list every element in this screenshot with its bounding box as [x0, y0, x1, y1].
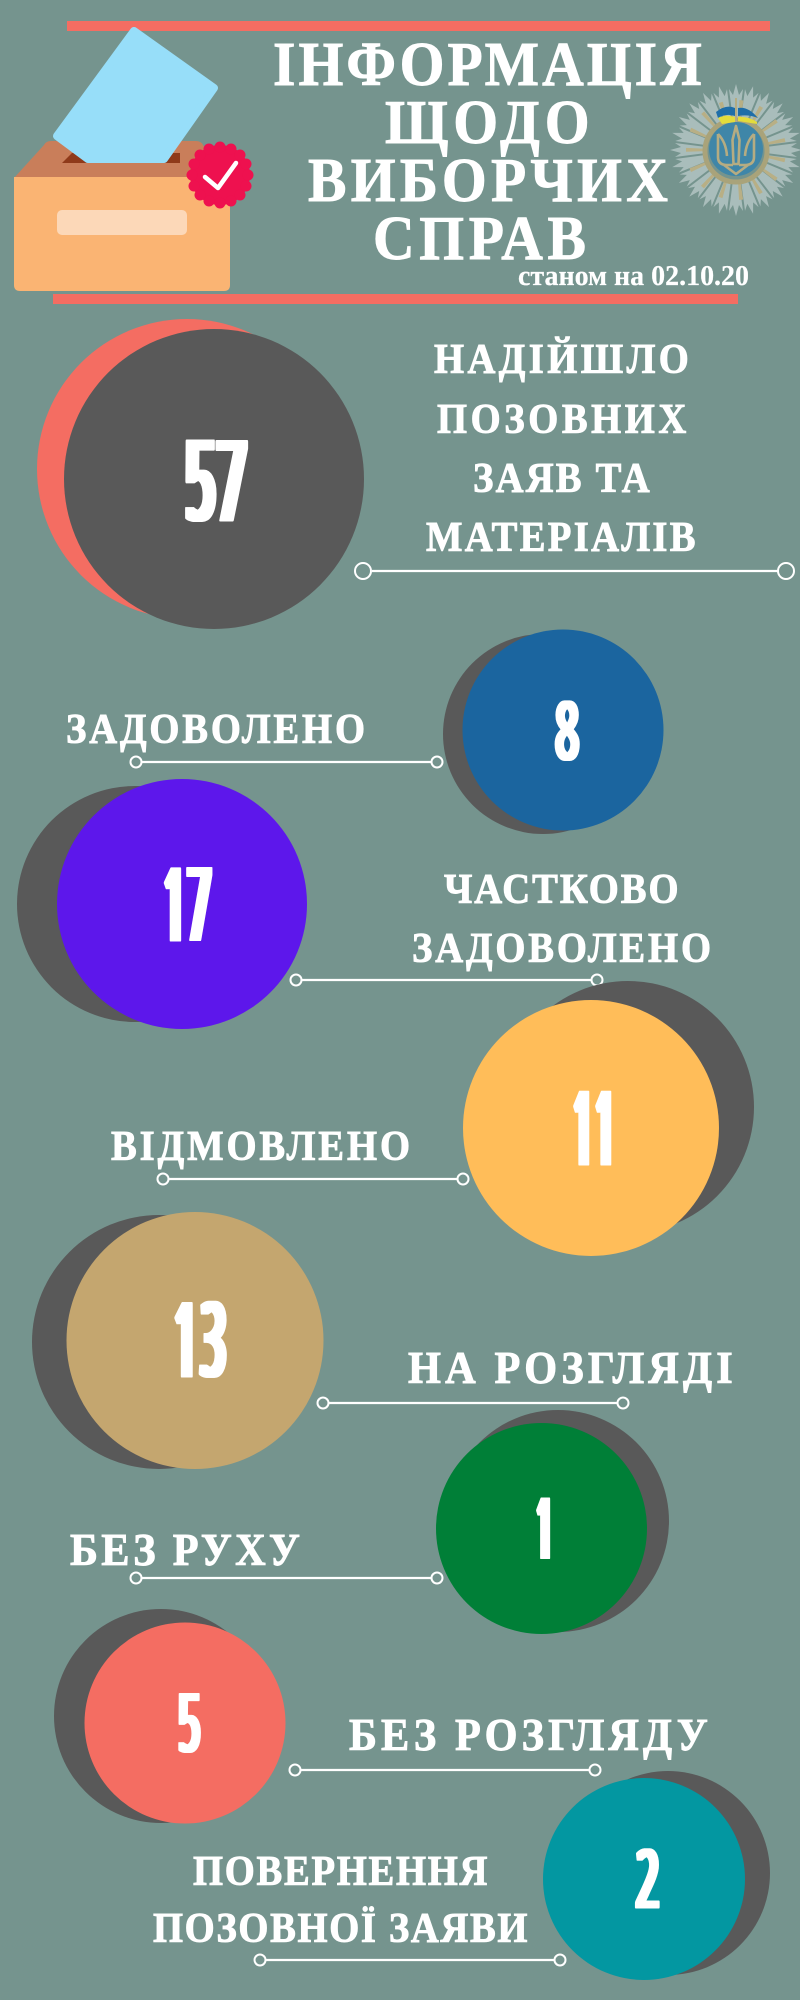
- title: ІНФОРМАЦІЯ: [273, 30, 702, 98]
- stat: 2 returned claim: 2: [635, 1842, 661, 1920]
- connector: [254, 1954, 566, 1966]
- label: ПОЗОВНИХ: [437, 396, 686, 442]
- label: БЕЗ РОЗГЛЯДУ: [349, 1709, 708, 1760]
- stat: 1 no movement: 1: [536, 1492, 553, 1572]
- header panel: [14, 21, 800, 304]
- connector: [318, 1398, 628, 1408]
- label: [426, 336, 696, 560]
- label: ЧАСТКОВО: [444, 866, 679, 912]
- label: ЗАЯВ ТА: [473, 455, 650, 501]
- label: [153, 1848, 527, 1951]
- icon: emblem: [670, 84, 800, 216]
- box front: [14, 177, 230, 291]
- connector: [290, 974, 602, 986]
- label: НА РОЗГЛЯДІ: [408, 1342, 733, 1393]
- label: ЗАДОВОЛЕНО: [412, 925, 711, 971]
- label: НАДІЙШЛО: [434, 336, 689, 382]
- stat: 11 refused: [111, 981, 754, 1256]
- top accent bar: [67, 21, 770, 31]
- stat: 8 granted: 8: [555, 694, 579, 772]
- box lid: [14, 141, 230, 178]
- label: ПОВЕРНЕННЯ: [193, 1848, 487, 1894]
- connector: [130, 1572, 442, 1584]
- stat: 5 without review: 5: [177, 1686, 201, 1764]
- label: ПОЗОВНОЇ ЗАЯВИ: [153, 1905, 527, 1951]
- title: [273, 30, 702, 272]
- connector: [130, 756, 442, 768]
- stat: 17 partially granted: 17: [162, 860, 212, 956]
- connector: [158, 1174, 468, 1184]
- stat: 8 granted: [66, 630, 664, 834]
- stat: 57 received: 57: [184, 431, 248, 537]
- box label: [57, 210, 187, 235]
- ballot paper: [57, 31, 214, 159]
- label: БЕЗ РУХУ: [70, 1524, 300, 1575]
- bottom accent bar: [53, 294, 738, 304]
- label: ВІДМОВЛЕНО: [111, 1123, 410, 1169]
- stat: 1 no movement: [70, 1410, 669, 1634]
- connector: [355, 563, 794, 579]
- title: СПРАВ: [373, 204, 586, 272]
- label: [412, 866, 711, 971]
- stat: 17 partially granted: [17, 779, 711, 1029]
- title: ВИБОРЧИХ: [308, 146, 668, 214]
- stat: 13 under review: 13: [172, 1294, 227, 1392]
- stat: 57 received: [37, 319, 794, 629]
- ballot slot: [62, 153, 180, 163]
- icon: ballot box: [14, 31, 254, 291]
- stat: 5 without review: [54, 1609, 708, 1824]
- stat: 13 under review: [32, 1212, 733, 1469]
- label: МАТЕРІАЛІВ: [426, 514, 696, 560]
- label: ЗАДОВОЛЕНО: [66, 706, 365, 752]
- date note: станом на 02.10.20: [518, 260, 749, 292]
- stat: 11 refused: 11: [572, 1083, 616, 1180]
- connector: [290, 1764, 600, 1776]
- stat: 2 returned claim: [153, 1771, 770, 1980]
- icon: check badge: [186, 142, 254, 208]
- title: ЩОДО: [385, 88, 590, 156]
